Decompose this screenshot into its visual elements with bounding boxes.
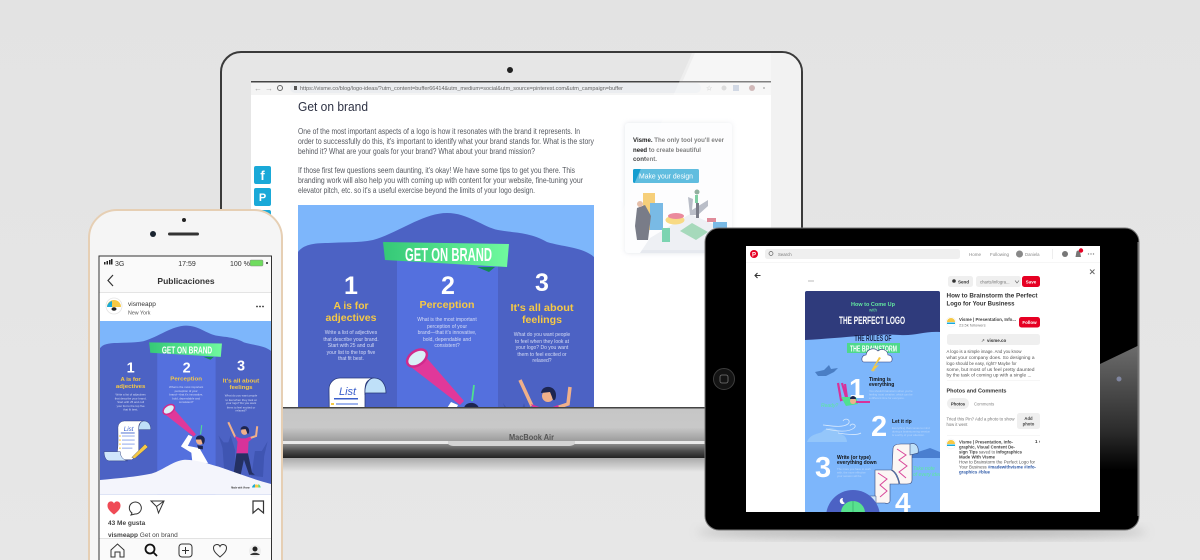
pin title: How to Come Up <box>851 302 896 308</box>
article paragraphs: If those first few questions seem daunting, it's okay! We have some tips to get you there. This <box>298 166 575 175</box>
rule 3: with, the more effective <box>837 470 866 474</box>
phone <box>89 210 282 560</box>
widget illustration <box>635 190 732 253</box>
phone column 3: your logo? Do you want <box>226 401 256 405</box>
rule 2: Everything that comes to mind <box>892 426 930 430</box>
rule 2: 2 <box>871 411 887 443</box>
pin description <box>946 349 1040 380</box>
phone column 2 <box>169 360 203 404</box>
phone column 2: What is the most important <box>169 385 203 389</box>
column 2: brand—that it's innovative, <box>418 330 476 336</box>
activity item: Your Business #madewithvisme #info- <box>959 464 1036 470</box>
author row <box>946 317 1040 328</box>
list scroll illustration: List <box>339 386 357 398</box>
browser toolbar: https://visme.co/blog/logo-ideas/?utm_content=buffer66414&utm_medium=social&utm_source=pinterest.com&utm_campaign=buffer <box>300 86 623 92</box>
pin infographic: the perfect logo <box>805 291 942 544</box>
tablet <box>705 228 1139 544</box>
column 1: adjectives <box>326 313 377 324</box>
telescope illustration <box>404 346 474 405</box>
column 1: your list to the top five <box>327 350 376 356</box>
phone column 3: 3 <box>237 359 245 375</box>
photos and comments: Tried this Pin? Add a photo to show <box>946 416 1015 422</box>
rule 1: everything <box>869 382 894 388</box>
activity item: How to Brainstorm the Perfect Logo for <box>959 460 1035 464</box>
rule 3: your session will be. <box>837 474 862 478</box>
laptop screen <box>251 81 771 407</box>
article heading: Get on brand <box>298 99 368 114</box>
phone column 1 <box>115 360 147 412</box>
visme.co link: visme.co <box>987 338 1007 343</box>
excited person illustration <box>518 379 572 407</box>
macbook air label: MacBook Air <box>509 433 554 442</box>
column 3: 3 <box>535 269 549 297</box>
pinterest top bar: Following <box>990 252 1010 257</box>
post actions <box>108 501 264 515</box>
article paragraphs: One of the most important aspects of a logo is how it resonates with the brand it represents. In <box>298 127 580 136</box>
pin title text: How to Brainstorm the Perfect <box>946 292 1038 300</box>
publicaciones header <box>99 275 272 293</box>
phone column 1: 1 <box>127 360 135 376</box>
icon: activity heart <box>214 545 226 557</box>
phone column 3: relaxed? <box>236 409 247 413</box>
phone column 2: perception of your <box>175 389 198 393</box>
phone column 3: them to feel excited or <box>227 405 255 409</box>
column 1: Start with 25 and cull <box>328 343 374 349</box>
phone column 3: feelings <box>229 385 253 391</box>
column 3: them to feel excited or <box>517 352 567 358</box>
photos and comments: Photos <box>951 402 966 406</box>
column 1 <box>323 272 379 362</box>
list scroll illustration <box>328 378 386 407</box>
pin actions: Save <box>1026 280 1037 284</box>
people shadows <box>503 404 525 407</box>
phone made with visme <box>231 484 261 488</box>
pin actions: Send <box>958 280 969 284</box>
phone screen frame <box>99 256 272 560</box>
phone man <box>181 435 208 463</box>
laptop lid glare <box>605 53 771 250</box>
column 3: What do you want people <box>514 332 570 338</box>
column 2: 2 <box>441 272 455 300</box>
pinterest top bar: P <box>752 252 756 258</box>
column 2: perception of your <box>427 324 467 330</box>
article paragraphs: elevator pitch, etc. so it's a useful exercise beyond the limits of your logo design. <box>298 186 535 195</box>
photos and comments <box>946 388 1040 436</box>
column 1: that describe your brand. <box>323 337 379 343</box>
column 1: A is for <box>334 301 369 312</box>
pin actions <box>948 276 1040 287</box>
phone body <box>89 210 282 560</box>
scroll of notes: Take note <box>913 466 935 472</box>
rule 4 number: 4 <box>895 487 911 518</box>
photos and comments: Photos and Comments <box>946 388 1006 394</box>
rule 3: 3 <box>815 452 831 484</box>
visme.co link <box>947 334 1040 345</box>
scene: three devices showing Visme content <box>88 51 1142 560</box>
phone column 1: adjectives <box>116 384 145 390</box>
column 2: Perception <box>420 300 474 311</box>
scroll of notes <box>865 444 942 503</box>
rule 2 <box>871 411 931 443</box>
phone column 3: It's all about <box>223 378 259 384</box>
phone column 2: consistent? <box>179 400 194 404</box>
widget text: content. <box>633 157 657 163</box>
pin title: THE RULES OF <box>854 333 892 343</box>
laptop <box>221 52 802 505</box>
icon: comment <box>129 502 141 515</box>
rule 2: is worthy of your attention. <box>892 433 925 437</box>
photos and comments: photo <box>1023 422 1035 426</box>
column 3: feelings <box>522 315 562 326</box>
post author: New York <box>128 310 151 316</box>
post author: vismeapp <box>128 301 156 308</box>
pin title: THE PERFECT LOGO <box>839 315 905 327</box>
widget text: need to create beautiful <box>633 148 701 154</box>
pin actions: charts/infogra... <box>980 280 1010 284</box>
column 3: your logo? Do you want <box>516 345 569 351</box>
pin description: some, but most of us feel pretty daunted <box>946 367 1035 373</box>
likes count: 43 Me gusta <box>108 520 146 527</box>
phone column 3 <box>223 359 259 413</box>
infographic: get on brand (laptop) <box>298 205 594 407</box>
phone excited person <box>228 422 257 476</box>
skydiver illustration <box>821 383 870 409</box>
phone list scroll: List <box>124 426 134 433</box>
icon: add <box>179 544 192 557</box>
activity item: Visme | Presentation, Info- <box>959 440 1013 444</box>
brainstorm banner <box>847 343 900 354</box>
pin description: by the task of coming up with a single ... <box>946 372 1032 378</box>
rule 1: feeling most creative, which can be <box>869 392 913 396</box>
phone list scroll <box>104 421 151 461</box>
rule 3: everything down <box>837 460 877 466</box>
share buttons <box>254 166 271 214</box>
activity item: sign Tips saved to Infographics <box>959 450 1022 454</box>
article paragraphs: branding work will also help you with coming up with content for your website, fine-tuning your <box>298 176 583 185</box>
pin description: what your company does. So designing a <box>946 355 1035 361</box>
globe illustration <box>826 490 880 544</box>
activity item: graphics #blue <box>959 470 990 474</box>
infographic: get on brand (phone) <box>100 321 271 494</box>
widget text <box>633 138 725 163</box>
photos and comments: how it went <box>946 422 968 427</box>
icon: send <box>151 501 164 513</box>
made with visme: Made with Visme <box>525 491 557 497</box>
share buttons: f <box>260 168 265 183</box>
tablet body <box>705 228 1139 530</box>
phone column 1: Start with 25 and cull <box>117 400 144 404</box>
phone banner <box>149 342 222 357</box>
activity item: 1 › <box>1035 439 1041 444</box>
rule 3 <box>815 452 877 484</box>
column 1: 1 <box>344 272 358 300</box>
column 3: relaxed? <box>532 358 552 364</box>
caption: vismeapp Get on brand <box>108 532 178 539</box>
icon: storm cloud <box>862 349 892 372</box>
rule 1: a different time for everyone. <box>869 396 905 400</box>
brainstorm banner: THE BRAINSTORM <box>850 344 897 354</box>
scroll of notes: of every idea <box>913 472 942 478</box>
phone column 2: 2 <box>183 360 191 376</box>
column 3: It's all about <box>510 303 574 314</box>
pinterest top bar <box>746 248 1100 262</box>
column 2: bold, dependable and <box>423 337 471 343</box>
rule 2: during a brainstorming session <box>892 430 931 434</box>
pinterest top bar: Home <box>969 252 982 257</box>
phone column 1: A is for <box>121 377 142 383</box>
tablet shadow <box>697 525 1147 539</box>
photos and comments: Add <box>1024 416 1033 421</box>
laptop base <box>282 407 780 458</box>
pinterest top bar: Search <box>778 252 792 257</box>
post author <box>106 298 264 316</box>
pinterest top bar: Daniela <box>1025 252 1040 257</box>
pin title: with <box>869 308 877 312</box>
status bar <box>104 259 268 266</box>
article paragraphs: behind it? What are your goals for your brand? What about your brand mission? <box>298 147 535 156</box>
rule 1 <box>849 373 913 404</box>
phone telescope <box>161 402 202 437</box>
column 2 <box>417 272 477 349</box>
pin more dots <box>808 280 814 282</box>
browser toolbar <box>251 81 771 95</box>
bottom navigation <box>99 538 272 560</box>
phone column 1: that fit best. <box>123 408 138 412</box>
author row: Visme | Presentation, Info... <box>959 317 1016 322</box>
navy header <box>805 291 940 340</box>
phone screen <box>99 256 272 560</box>
wind and cloud <box>807 419 861 442</box>
tablet screen: pinterest <box>746 246 1100 544</box>
pin title text <box>946 292 1038 308</box>
column 2: consistent? <box>434 343 460 349</box>
laptop lid <box>221 52 802 407</box>
column 1: that fit best. <box>338 356 364 362</box>
icon: search <box>146 544 157 556</box>
rule 1: Timing is <box>869 377 891 383</box>
made with visme <box>525 487 576 497</box>
phone column 2: brand—that it's innovative, <box>169 393 203 397</box>
icon: bookmark <box>253 501 264 513</box>
status bar: 100 % <box>230 261 250 268</box>
rule 3: Write (or type) <box>837 455 871 461</box>
activity item: Made With Visme <box>959 454 995 460</box>
author row: 23.5k followers <box>959 322 986 328</box>
phone column 2: bold, dependable and <box>172 397 200 401</box>
phone column 3: to feel when they look at <box>226 398 257 402</box>
banner: GET ON BRAND <box>405 245 492 265</box>
column 1: Write a list of adjectives <box>325 330 378 336</box>
status bar: 17:59 <box>178 261 196 268</box>
pin title text: Logo for Your Business <box>946 300 1015 308</box>
phone made with visme: Made with Visme <box>231 486 250 490</box>
browser toolbar: → <box>265 84 273 93</box>
publicaciones header: Publicaciones <box>157 276 215 286</box>
phone column 2: Perception <box>170 377 203 383</box>
icon: plane <box>815 365 838 376</box>
visme sidebar widget <box>625 123 732 253</box>
icon: home <box>111 544 124 557</box>
phone snow hill <box>100 460 271 494</box>
phone people shadows <box>218 435 268 477</box>
rule 1: 1 <box>849 373 865 404</box>
article paragraphs: order to successfully do this, it's important to identify what your brand stands for. What is the story <box>298 137 594 146</box>
browser toolbar: ← <box>254 84 262 93</box>
rule 3: The more you have to work <box>837 467 871 471</box>
pin title <box>839 302 905 343</box>
phone column 1: that describe your brand. <box>115 397 147 401</box>
icon: heart <box>108 501 120 514</box>
photos and comments: Comments <box>974 402 994 406</box>
pin description: logo should be easy, right? Maybe for <box>946 361 1017 367</box>
phone column 1: Write a list of adjectives <box>116 393 146 397</box>
phone column 3: What do you want people <box>225 394 258 398</box>
browser toolbar: ☆ <box>706 84 712 92</box>
phone banner: GET ON BRAND <box>162 345 212 356</box>
man illustration <box>448 402 478 407</box>
column 3: to feel when they look at <box>515 339 570 345</box>
column 3 <box>510 269 574 364</box>
status bar: 3G <box>115 261 124 268</box>
hills right <box>905 448 940 458</box>
column 2: What is the most important <box>417 317 477 323</box>
icon: profile avatar <box>249 545 261 557</box>
pin description: A logo is a simple image. And you know <box>946 349 1022 355</box>
banner <box>383 242 509 267</box>
rule 2: Let it rip <box>892 419 912 425</box>
rule 1: You should brainstorm when you're <box>869 389 913 393</box>
phone column 1: your list to the top five <box>117 404 145 408</box>
author row: Follow <box>1022 320 1037 325</box>
shadow under laptop <box>282 458 722 472</box>
activity item <box>946 439 1041 474</box>
widget text: Visme. The only tool you'll ever <box>633 138 725 144</box>
snow hill <box>298 445 594 505</box>
make your design button: Make your design <box>639 174 693 180</box>
article paragraphs <box>298 127 594 195</box>
share buttons: P <box>259 192 266 204</box>
skydiver illustration: Ready? <box>821 403 838 409</box>
close and back icons <box>755 270 1094 278</box>
activity item: graphic, Visual Content De- <box>959 444 1015 450</box>
visme.co link: ↗ <box>981 338 985 343</box>
